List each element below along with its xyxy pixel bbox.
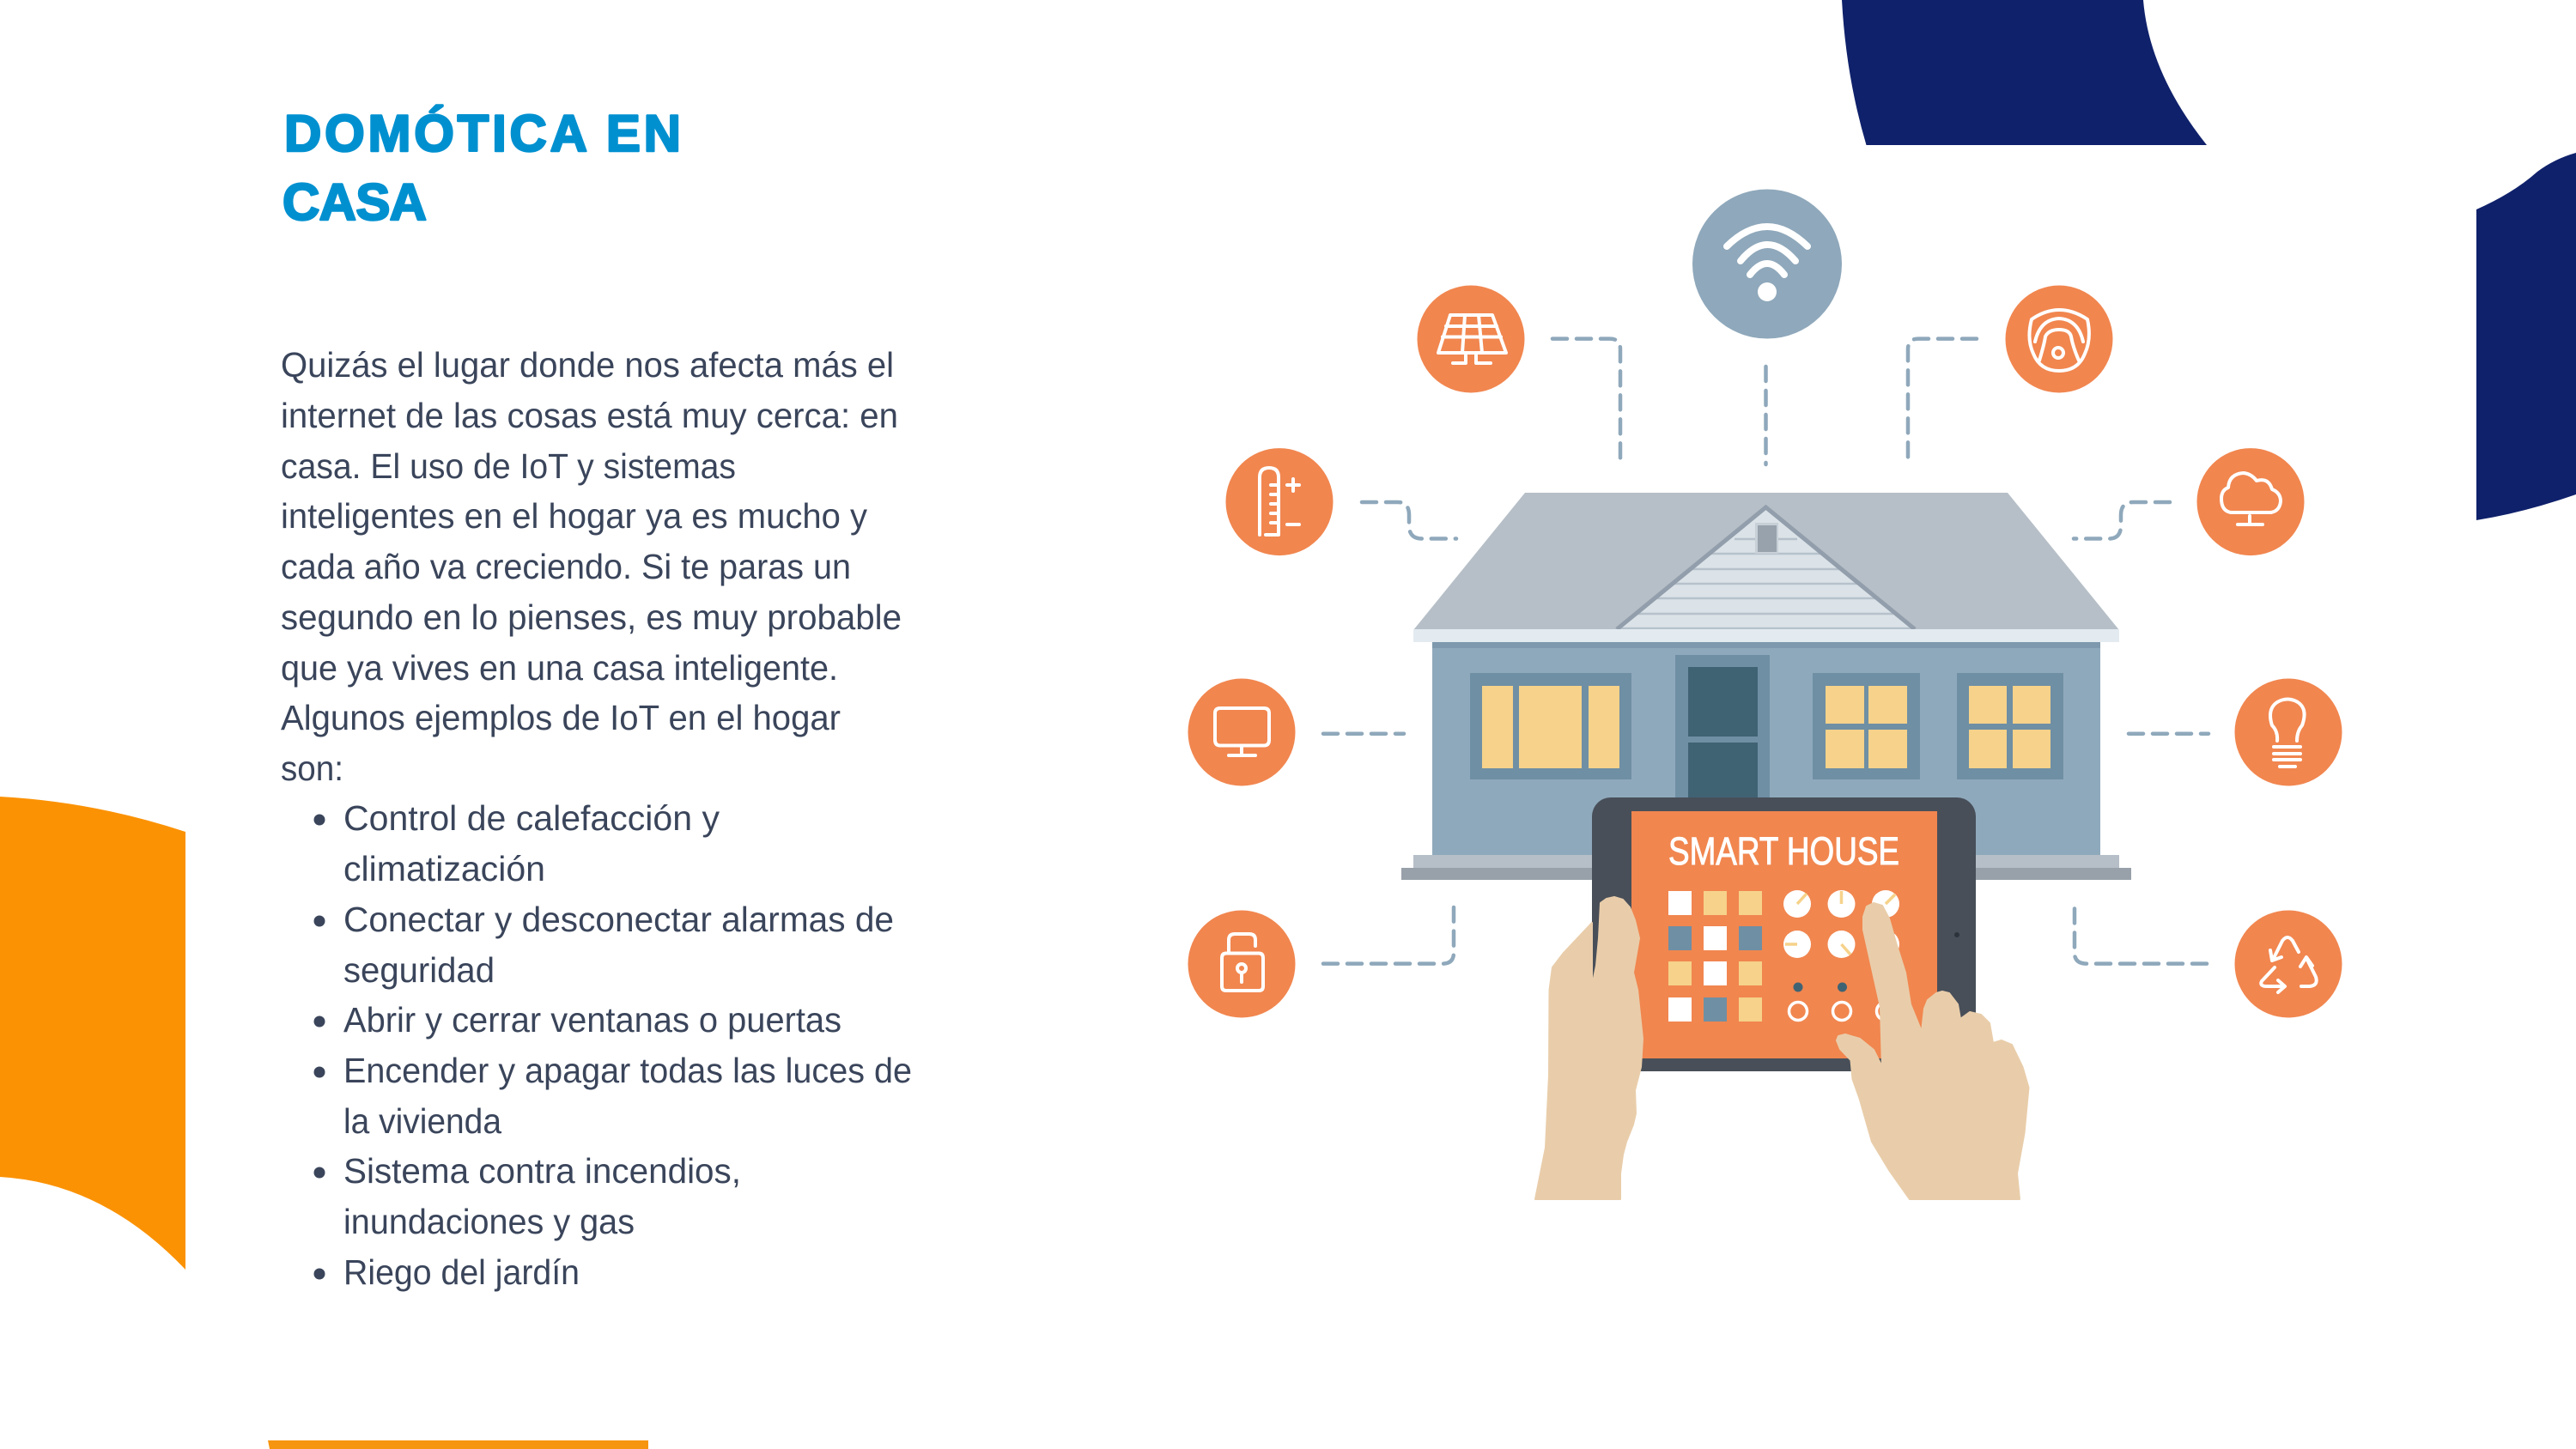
dashed connectors (1323, 339, 2208, 964)
decorative shape: orange band left (0, 797, 185, 1270)
dials (1783, 890, 1899, 1020)
icon: recycle (2234, 910, 2342, 1018)
text block: introduction paragraph: segundo en lo pienses, es muy probable (281, 597, 902, 637)
text block: introduction paragraph: internet de las cosas está muy cerca: en (281, 396, 898, 435)
icon: security camera (2006, 285, 2112, 393)
icon: padlock (1188, 910, 1295, 1018)
text block: introduction paragraph: cada año va creciendo. Si te paras un (281, 547, 851, 586)
text block: introduction paragraph: Quizás el lugar donde nos afecta más el (281, 345, 894, 385)
title (283, 105, 681, 231)
illustration: smart house (1188, 189, 2342, 1199)
bullet list: IoT examples (314, 798, 912, 1292)
bullet list: IoT examples: Control de calefacción y (343, 798, 720, 838)
bullet list: IoT examples: seguridad (343, 950, 495, 990)
icon: monitor (1188, 678, 1295, 786)
decorative shape: navy right (2476, 153, 2576, 520)
tablet label: SMART HOUSE (1668, 829, 1899, 873)
icon: light bulb (2234, 678, 2342, 786)
right hand (1837, 903, 2028, 1199)
title: DOMÓTICA EN (284, 105, 681, 162)
bullet list: IoT examples: climatización (343, 849, 545, 888)
house (1401, 493, 2131, 880)
decorative shape: navy top (1842, 0, 2207, 145)
text block: introduction paragraph: son: (281, 749, 343, 788)
bullet list: IoT examples: Conectar y desconectar alarmas de (343, 900, 894, 939)
bullet list: IoT examples: Sistema contra incendios, (343, 1151, 741, 1191)
left hand (1535, 897, 1643, 1199)
roof (1413, 493, 2119, 630)
icon: thermometer (1226, 448, 1333, 555)
wall (1432, 642, 2100, 855)
bullet list: IoT examples: Riego del jardín (343, 1252, 580, 1292)
bullet list: IoT examples: la vivienda (343, 1101, 501, 1141)
bullet list: IoT examples: Abrir y cerrar ventanas o puertas (343, 1000, 841, 1040)
bullet list: IoT examples: inundaciones y gas (343, 1202, 635, 1241)
icon: cloud (2196, 448, 2305, 555)
text block: introduction paragraph (281, 345, 902, 788)
text block: introduction paragraph: que ya vives en una casa inteligente. (281, 648, 838, 688)
tablet (1592, 797, 1976, 1071)
door (1675, 655, 1770, 818)
gable (1617, 507, 1915, 629)
text block: introduction paragraph: inteligentes en el hogar ya es mucho y (281, 496, 867, 536)
porch base (1401, 855, 2131, 880)
title: CASA (283, 173, 427, 231)
text block: introduction paragraph: Algunos ejemplos de IoT en el hogar (281, 698, 841, 737)
icon: solar panel (1417, 285, 1525, 393)
text block: introduction paragraph: casa. El uso de IoT y sistemas (281, 446, 736, 486)
decorative shape: orange bottom bar (268, 1440, 648, 1449)
icon: wifi (1692, 189, 1842, 338)
bullet list: IoT examples: Encender y apagar todas las luces de (343, 1051, 912, 1090)
window left (1470, 673, 1631, 779)
window right (1957, 673, 2063, 779)
eave (1413, 629, 2119, 642)
switch squares (1668, 891, 1762, 1022)
window centre right (1813, 673, 1920, 779)
